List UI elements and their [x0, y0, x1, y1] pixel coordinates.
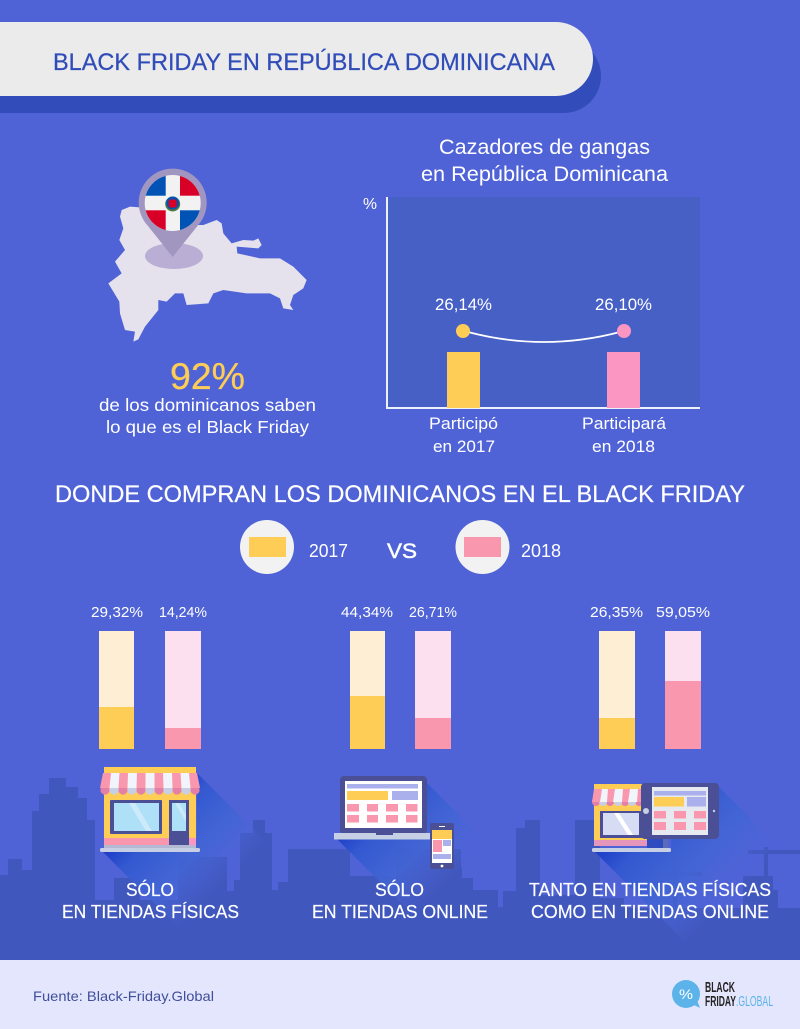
stat: 92% awareness: lo que es el Black Friday — [106, 417, 309, 437]
icon: storefront — [100, 767, 268, 927]
logo: FRIDAY — [705, 993, 736, 1010]
pin shadow — [145, 243, 203, 269]
chart heading: Cazadores de gangas — [439, 136, 650, 159]
logo: .GLOBAL — [736, 993, 773, 1010]
logo: % — [679, 986, 693, 1002]
caption: online stores: SÓLO — [375, 879, 424, 900]
bars: online stores: 26,71% — [409, 604, 457, 621]
legend: 2018: 2018 — [521, 541, 561, 561]
caption: physical stores: SÓLO — [126, 879, 174, 900]
axis label: 2018: Participará — [582, 415, 667, 433]
bar: 2017 — [447, 352, 480, 408]
legend: vs: VS — [387, 540, 417, 563]
bars: both channels — [590, 604, 710, 749]
point: 2018 — [617, 324, 631, 338]
bars: both channels: 26,35% — [590, 604, 643, 621]
phone — [430, 823, 454, 869]
bars: physical stores: 14,24% — [159, 604, 207, 621]
caption: online stores: EN TIENDAS ONLINE — [312, 902, 488, 922]
bargain hunters chart: % — [363, 196, 377, 213]
value: 2018: 26,10% — [595, 295, 652, 314]
section heading: DONDE COMPRAN LOS DOMINICANOS EN EL BLACK FRIDAY — [55, 481, 745, 508]
axis label: 2018: en 2018 — [592, 438, 655, 456]
caption: online stores — [312, 879, 488, 922]
bar: 2018 — [607, 352, 640, 408]
legend: 2017 — [240, 520, 348, 574]
axis label: 2017 — [429, 415, 498, 456]
axis label: 2017: en 2017 — [433, 438, 495, 456]
flag — [144, 175, 202, 231]
legend: 2017: 2017 — [309, 541, 348, 561]
caption: both channels — [529, 880, 771, 922]
bars: online stores — [341, 604, 457, 749]
small store — [592, 784, 647, 846]
logo: BLACK — [705, 979, 735, 996]
bars: online stores: 44,34% — [341, 604, 393, 621]
bars: both channels: 59,05% — [656, 604, 710, 621]
tablet — [641, 783, 719, 839]
chart heading: en República Dominicana — [421, 163, 668, 186]
caption: both channels: COMO EN TIENDAS ONLINE — [531, 902, 769, 922]
bargain hunters chart — [363, 196, 700, 456]
point: 2017 — [456, 324, 470, 338]
bars: physical stores — [91, 604, 207, 749]
stat: 92% awareness — [99, 356, 316, 437]
footer — [0, 960, 800, 1029]
logo — [672, 979, 773, 1010]
stat: 92% awareness: de los dominicanos saben — [99, 395, 316, 415]
icon: laptop and phone — [334, 776, 497, 917]
caption: physical stores — [62, 879, 239, 922]
stat: 92% awareness: 92% — [170, 356, 245, 397]
map of Dominican Republic with flag pin — [108, 169, 307, 342]
icon: store and tablet — [592, 783, 782, 942]
pin — [139, 169, 207, 257]
source note: Fuente: Black-Friday.Global — [33, 988, 214, 1004]
value: 2017: 26,14% — [435, 295, 492, 314]
legend — [240, 520, 561, 574]
caption: both channels: TANTO EN TIENDAS FÍSICAS — [529, 880, 771, 900]
caption: physical stores: EN TIENDAS FÍSICAS — [62, 902, 239, 922]
axis label: 2017: Participó — [429, 415, 498, 433]
chart heading — [421, 136, 668, 186]
map silhouette — [108, 207, 307, 342]
title banner: BLACK FRIDAY EN REPÚBLICA DOMINICANA — [53, 49, 555, 76]
bars: physical stores: 29,32% — [91, 604, 143, 621]
axis label: 2018 — [582, 415, 667, 456]
connector curve — [468, 332, 620, 342]
city skyline — [0, 778, 800, 960]
legend: 2018 — [456, 520, 561, 574]
laptop — [334, 776, 433, 840]
title banner — [0, 22, 601, 113]
